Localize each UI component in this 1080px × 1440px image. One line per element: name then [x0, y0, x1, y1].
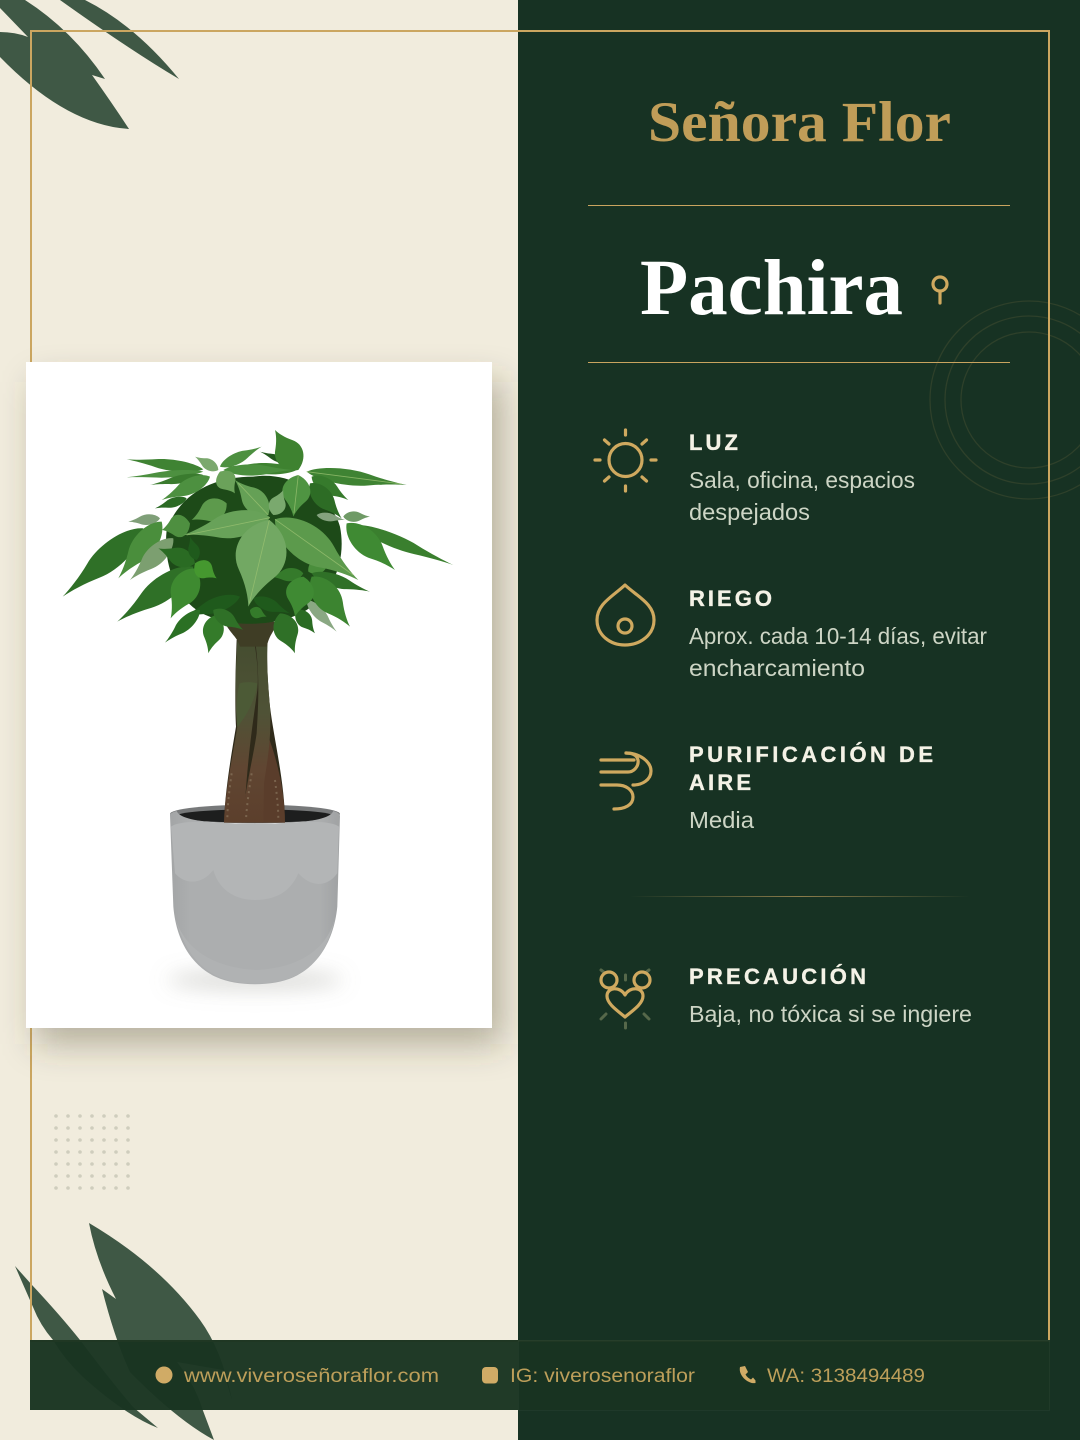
- plant foliage: [54, 423, 456, 658]
- plant pot: [170, 805, 340, 984]
- care item: riego: [597, 585, 987, 681]
- care item: luz: [595, 430, 915, 525]
- photo card shadow: [36, 382, 502, 1044]
- description: luz: Sala, oficina, espacios: [689, 467, 915, 493]
- heading: luz: LUZ: [689, 430, 738, 455]
- section divider: [630, 896, 970, 897]
- decorative leaves: bottom left: [15, 1223, 232, 1440]
- panel: dark green background: [518, 0, 1080, 1440]
- plant name: Pachira: [640, 245, 903, 332]
- heading: precaucion: PRECAUCIÓN: [689, 964, 866, 989]
- icon: water drop: [597, 585, 654, 645]
- footer contact bar: [30, 1340, 1050, 1410]
- description: riego: Aprox. cada 10-14 días, evitar: [689, 623, 987, 649]
- icon: instagram square: [482, 1367, 498, 1384]
- heading: riego: RIEGO: [689, 586, 772, 611]
- pot shadow: [167, 970, 343, 990]
- dark foliage mass: [166, 476, 342, 624]
- icon: pin: [933, 277, 947, 303]
- dark panel edge over shadow: [518, 280, 608, 1140]
- decorative leaves: top left: [0, 0, 179, 129]
- brand title: Señora Flor: [648, 91, 951, 154]
- panel: cream background: [0, 0, 518, 1440]
- dot grid pattern: [54, 1114, 130, 1190]
- photo card: pachira plant in grey pot: [26, 362, 492, 1028]
- icon: web dot: [156, 1366, 172, 1384]
- instagram handle: IG: viverosenoraflor: [510, 1366, 696, 1387]
- heading: purificacion de aire: AIRE: [689, 770, 751, 795]
- description: precaucion: Baja, no tóxica si se ingiere: [689, 1001, 972, 1027]
- description: purificacion de aire: Media: [689, 807, 754, 833]
- braided trunk: [224, 640, 285, 823]
- care item: purificacion de aire: [601, 742, 933, 833]
- icon: wind: [601, 753, 651, 809]
- stem neck: [225, 610, 277, 647]
- care item: precaucion: [601, 964, 972, 1028]
- description: riego: encharcamiento: [689, 655, 865, 681]
- description: riego: [689, 623, 987, 681]
- heading: purificacion de aire: PURIFICACIÓN DE: [689, 742, 933, 767]
- heading: purificacion de aire: [689, 742, 933, 795]
- icon: sun: [595, 430, 656, 491]
- lower divider: [588, 362, 1010, 363]
- icon: phone: [740, 1366, 756, 1383]
- description: luz: despejados: [689, 499, 810, 525]
- concentric rings decoration: [930, 301, 1080, 499]
- top divider: [588, 205, 1010, 206]
- whatsapp number: WA: 3138494489: [767, 1366, 925, 1387]
- description: luz: [689, 467, 915, 525]
- icon: heart with rays: [601, 970, 650, 1028]
- website: www.viveroseñoraflor.com: [183, 1366, 439, 1387]
